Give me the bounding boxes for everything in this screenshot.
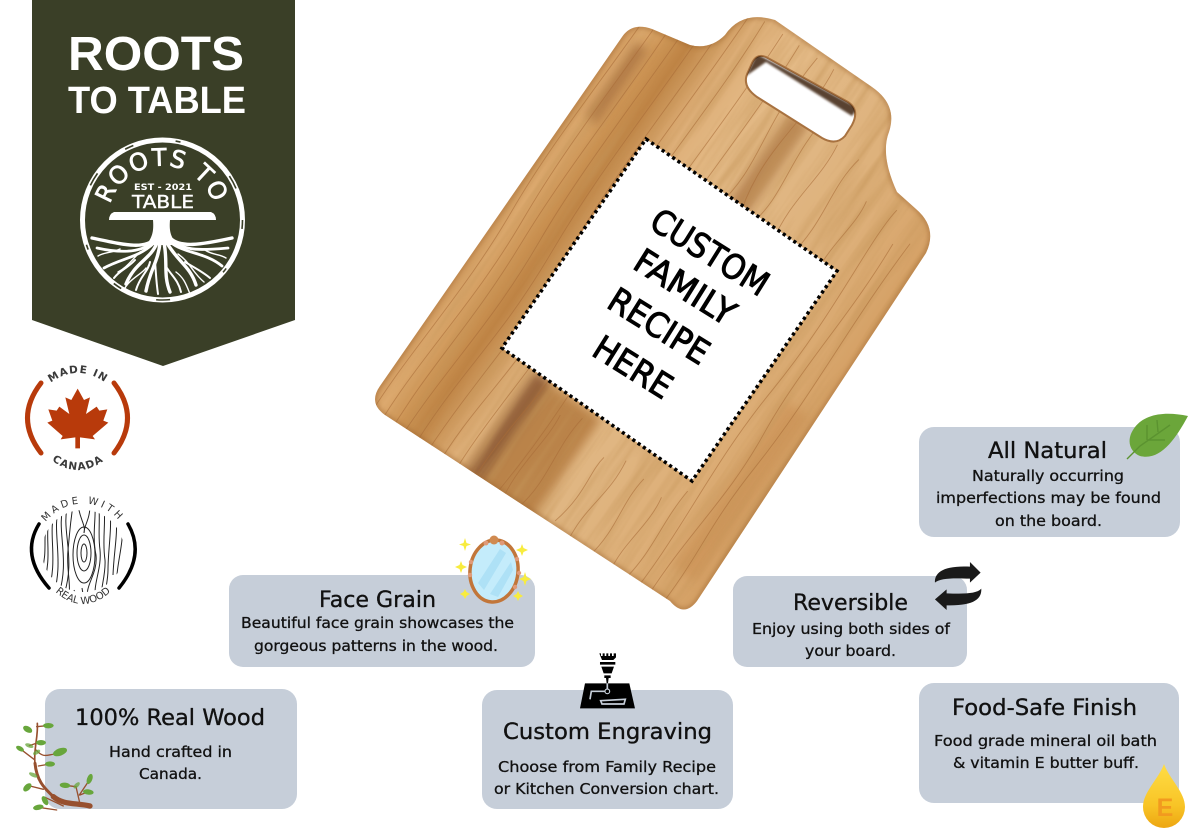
circular roots logo — [80, 138, 245, 302]
body text: imperfections may be found — [936, 489, 1161, 507]
body text — [934, 732, 1157, 772]
badge text: MADE IN — [48, 365, 108, 382]
panel: custom engraving — [482, 653, 733, 809]
panel: 100% real wood — [15, 689, 297, 811]
logo banner — [32, 0, 295, 366]
body text: Naturally occurring — [972, 467, 1124, 485]
heading: Reversible — [793, 591, 908, 616]
brand title: TO TABLE — [68, 80, 246, 122]
badge text: CANADA — [54, 456, 104, 470]
badge text: MADE WITH — [40, 496, 123, 522]
icon: leaf — [1127, 414, 1188, 459]
body text — [936, 467, 1161, 530]
heading: All Natural — [988, 439, 1107, 464]
body text: Canada. — [139, 765, 202, 783]
icon: wood grain — [44, 510, 122, 592]
body text — [109, 743, 232, 783]
body text: your board. — [805, 642, 896, 660]
icon: vitamin e drop: E — [1157, 794, 1173, 822]
board wood — [375, 17, 930, 610]
recipe placeholder text: RECIPE — [600, 280, 717, 373]
panel: reversible — [733, 562, 981, 667]
icon: engraving machine — [580, 653, 635, 708]
recipe placeholder text: HERE — [585, 328, 680, 408]
badge arcs — [28, 383, 128, 453]
icon: mirror — [455, 536, 531, 604]
body text: gorgeous patterns in the wood. — [254, 637, 498, 655]
recipe placeholder panel — [502, 139, 837, 481]
badge: made in canada — [24, 365, 130, 470]
heading: Face Grain — [319, 588, 436, 613]
panel: all natural — [919, 414, 1188, 537]
body text — [752, 620, 951, 660]
heading: Food-Safe Finish — [952, 696, 1137, 721]
handle hole — [746, 54, 858, 142]
body text — [494, 758, 719, 798]
circular roots logo: ROOTS TO — [94, 148, 227, 202]
heading: 100% Real Wood — [75, 706, 265, 731]
body text: on the board. — [995, 512, 1102, 530]
body text: Enjoy using both sides of — [752, 620, 951, 638]
body text: Beautiful face grain showcases the — [241, 614, 514, 632]
brand title — [68, 28, 246, 122]
body text: Food grade mineral oil bath — [934, 732, 1157, 750]
badge text — [48, 365, 108, 470]
panel: face grain — [229, 536, 535, 667]
icon: leafy branch — [15, 723, 94, 811]
banner shape — [32, 0, 295, 366]
heading: Custom Engraving — [503, 720, 712, 745]
badge: made with real wood — [30, 496, 137, 604]
body text — [241, 614, 514, 655]
body text: Hand crafted in — [109, 743, 232, 761]
body text: or Kitchen Conversion chart. — [494, 780, 719, 798]
badge arcs — [31, 524, 135, 588]
body text: Choose from Family Recipe — [498, 758, 716, 776]
body text: & vitamin E butter buff. — [953, 754, 1139, 772]
badge text — [40, 496, 123, 604]
panel: food-safe finish — [919, 683, 1185, 828]
edge shading — [375, 17, 930, 609]
circular roots logo: EST - 2021 — [134, 183, 192, 193]
brand title: ROOTS — [68, 28, 244, 81]
recipe placeholder text: CUSTOM — [643, 201, 776, 305]
icon: swap arrows — [935, 562, 981, 610]
cutting board — [375, 17, 930, 610]
icon: maple leaf — [47, 389, 108, 448]
recipe placeholder text — [585, 201, 776, 408]
badge text: REAL WOOD — [56, 586, 109, 604]
circular roots logo: TABLE — [131, 192, 194, 213]
icon: vitamin e drop — [1143, 764, 1185, 828]
recipe placeholder text: FAMILY — [626, 241, 743, 335]
